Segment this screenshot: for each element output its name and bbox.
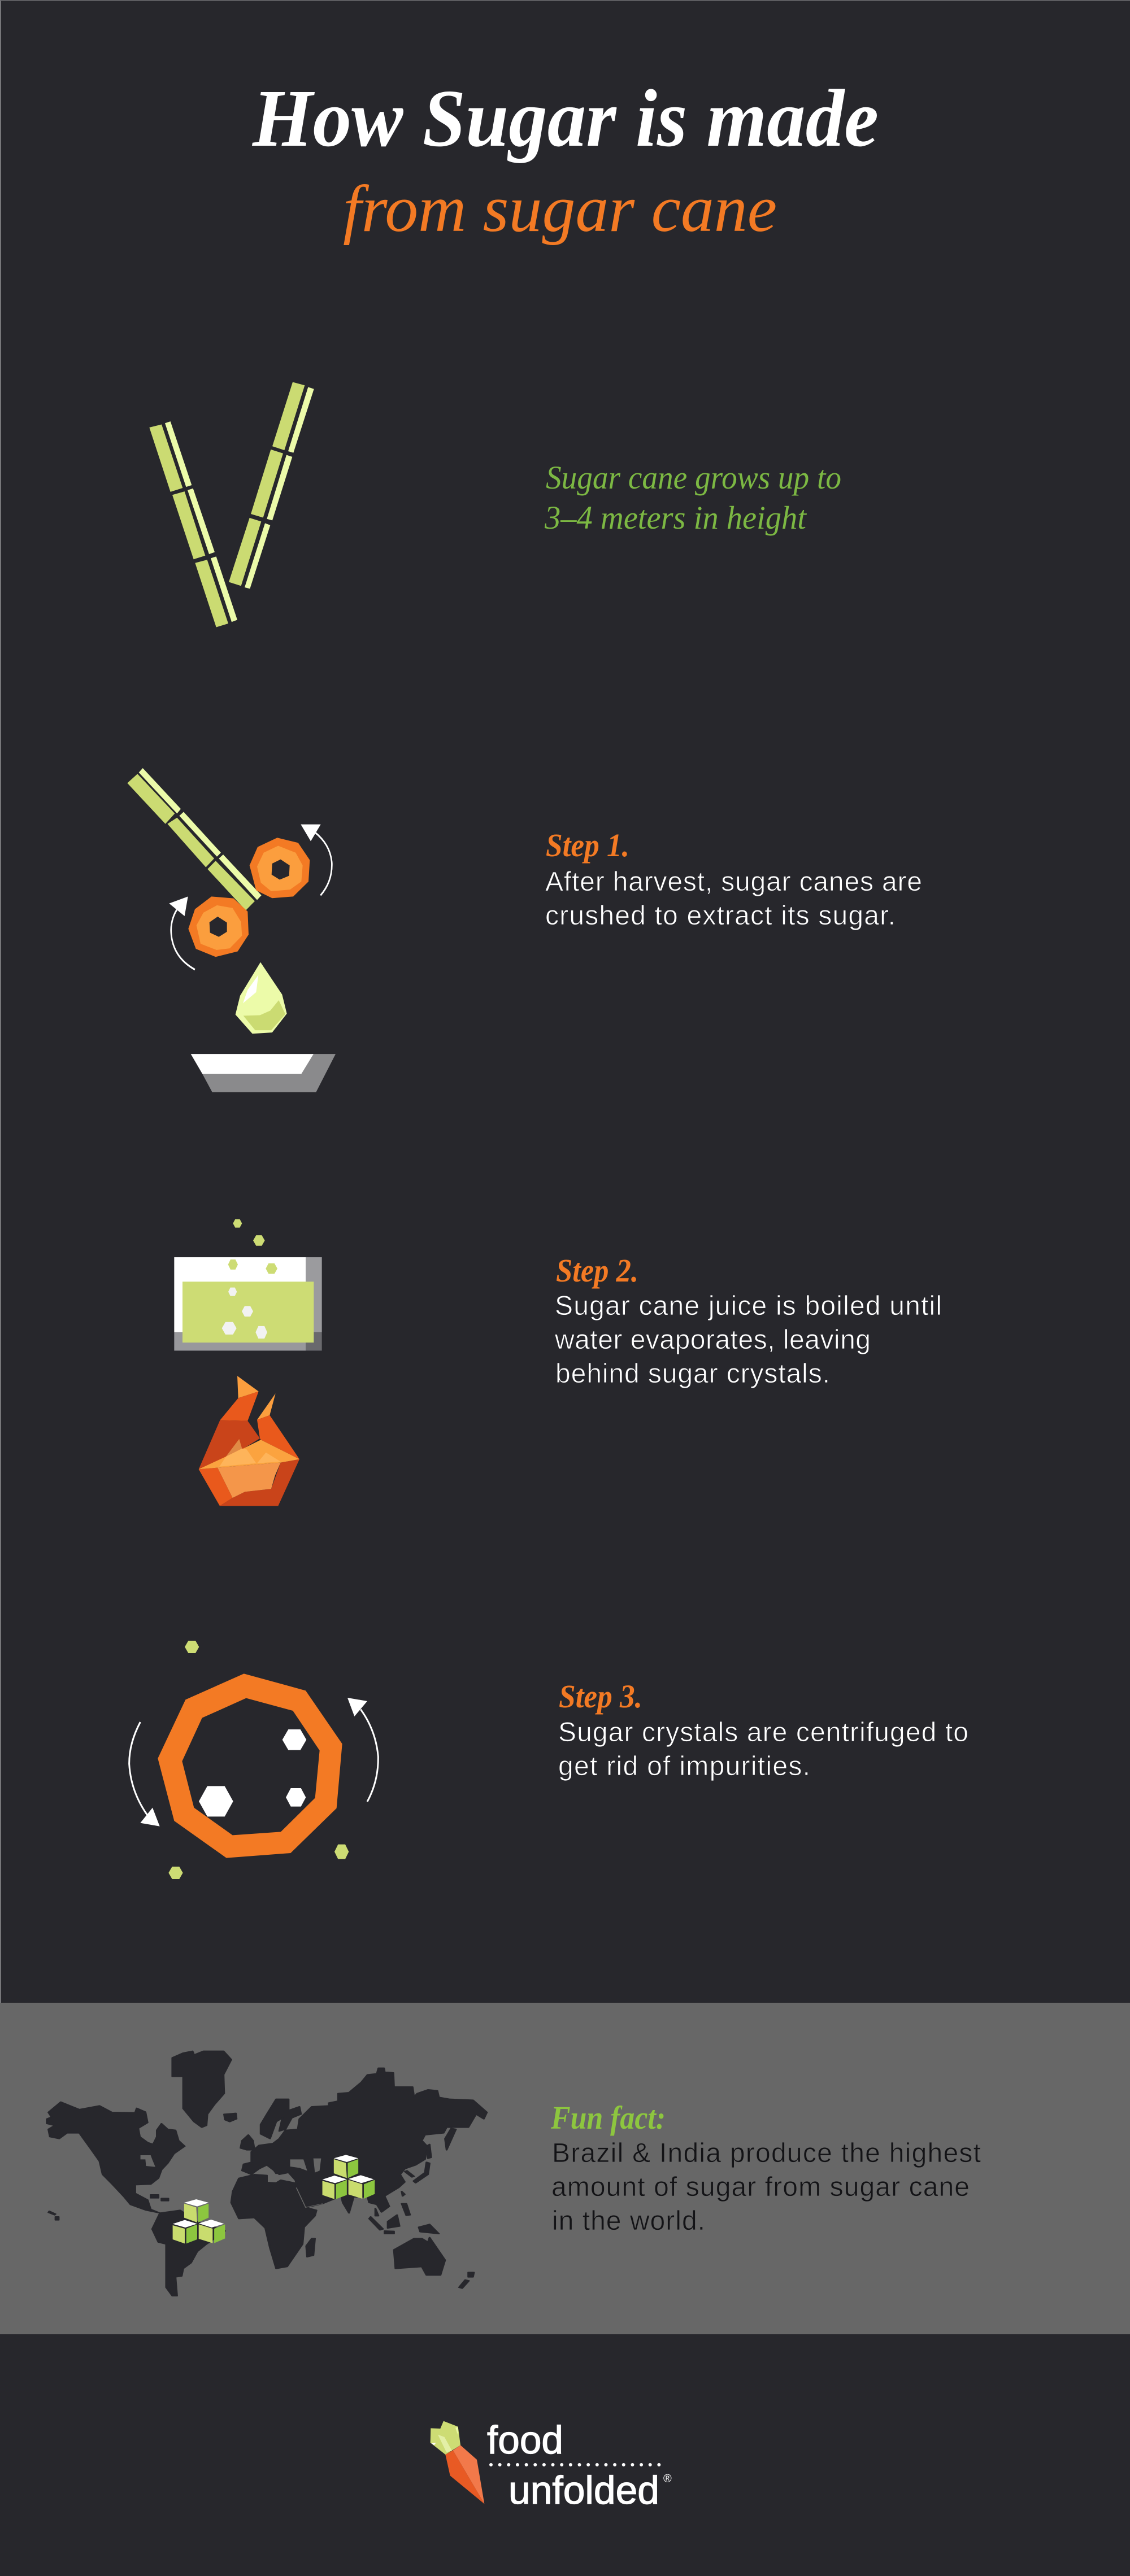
wordmark xyxy=(487,2418,672,2512)
arrow: right rotation xyxy=(347,1698,378,1802)
white crystals xyxy=(199,1729,306,1816)
arrow: right roller rotation xyxy=(301,825,332,895)
orange centrifuge ring xyxy=(158,1673,342,1858)
green impurities xyxy=(168,1641,349,1879)
text: fun fact: Brazil & India produce the highest xyxy=(552,2138,981,2168)
text: sugar cane height: 3–4 meters in height xyxy=(544,499,807,536)
text: sugar cane height: Sugar cane grows up to xyxy=(546,459,841,496)
text: step 2: water evaporates, leaving xyxy=(554,1325,871,1355)
sugar cane being crushed xyxy=(127,768,262,910)
text: step 2: Sugar cane juice is boiled until xyxy=(555,1291,942,1321)
logo: food unfolded xyxy=(431,2418,672,2512)
icon: carrot xyxy=(431,2421,484,2504)
continents xyxy=(47,2051,487,2296)
sugar cubes on Brazil xyxy=(173,2199,225,2243)
text: step 1: Step 1. xyxy=(546,827,629,864)
juice drop xyxy=(236,962,287,1034)
text: step 3: Step 3. xyxy=(559,1678,642,1715)
text: step 1: After harvest, sugar canes are xyxy=(545,867,922,897)
arrow: left roller rotation xyxy=(169,896,195,970)
text: fun fact: in the world. xyxy=(552,2206,705,2236)
icon: two sugar canes xyxy=(149,382,314,627)
text: step 2: behind sugar crystals. xyxy=(555,1359,830,1389)
text: sugar cane height xyxy=(544,459,841,536)
right roller xyxy=(250,838,310,898)
text: step 2: Step 2. xyxy=(556,1252,638,1289)
wordmark: ® xyxy=(663,2473,672,2485)
arrow: left rotation xyxy=(129,1722,160,1827)
text: step 3: get rid of impurities. xyxy=(558,1751,810,1781)
text: fun fact: Fun fact: xyxy=(550,2099,666,2136)
pot xyxy=(174,1257,322,1350)
text: step 1: crushed to extract its sugar. xyxy=(545,901,896,931)
subheading: from sugar cane: from sugar cane xyxy=(343,172,777,246)
bowl xyxy=(191,1054,336,1092)
text: fun fact: amount of sugar from sugar cane xyxy=(551,2172,970,2202)
wordmark: food xyxy=(487,2418,563,2462)
rising green crystals xyxy=(228,1219,277,1274)
wordmark: unfolded xyxy=(508,2468,659,2512)
text: step 1 xyxy=(545,827,922,931)
sugar cubes on India xyxy=(323,2155,375,2199)
fire xyxy=(199,1376,299,1506)
icon: boiling pot over fire xyxy=(174,1219,322,1506)
icon: crushing rollers, juice drop and bowl xyxy=(127,768,336,1092)
text: step 3: Sugar crystals are centrifuged to xyxy=(558,1718,968,1747)
panel: fun fact band xyxy=(0,2003,1130,2334)
icon: centrifuge xyxy=(129,1641,378,1879)
heading: How Sugar is made: How Sugar is made xyxy=(251,73,879,164)
white crystals in juice xyxy=(222,1288,267,1339)
title xyxy=(251,73,879,246)
world map with sugar cubes xyxy=(47,2051,487,2296)
text: step 3 xyxy=(558,1678,968,1781)
left roller xyxy=(188,896,249,957)
text: fun fact xyxy=(550,2099,981,2236)
text: step 2 xyxy=(554,1252,942,1389)
